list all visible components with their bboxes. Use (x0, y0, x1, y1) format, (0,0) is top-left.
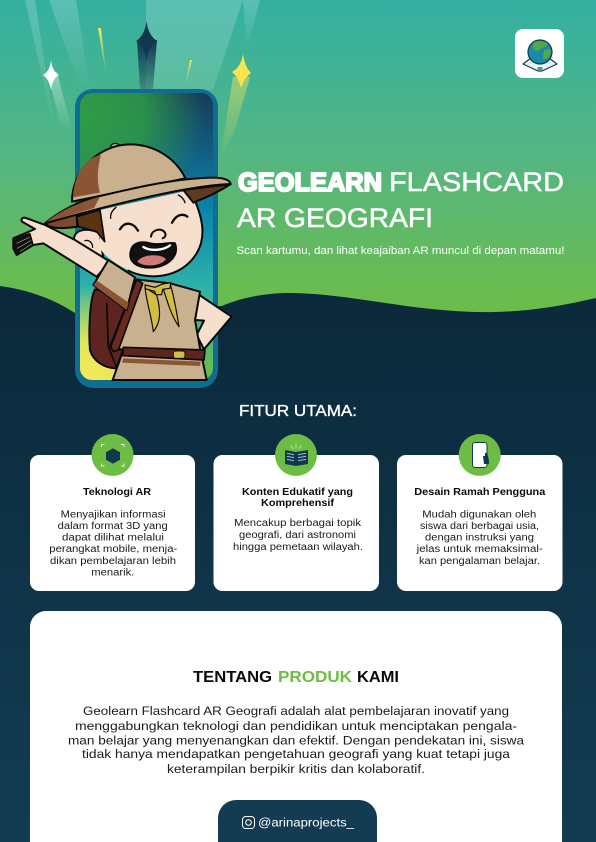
card text: menarik. (91, 568, 134, 578)
icon: phone with hand (459, 434, 501, 476)
heading: KAMI (357, 669, 399, 686)
head (100, 190, 202, 276)
eyes (120, 215, 187, 231)
hat (45, 143, 231, 228)
title: Flashcard: FLASHCARD (389, 167, 564, 197)
description (68, 704, 524, 776)
heading: TENTANG (193, 669, 272, 686)
card text: Mudah digunakan oleh (422, 510, 536, 520)
hat crown (72, 144, 185, 202)
heading (193, 669, 399, 686)
star: white (43, 60, 59, 90)
card title (242, 487, 353, 509)
icon: open book (275, 434, 317, 476)
backpack (89, 289, 140, 368)
description: Geolearn Flashcard AR Geografi adalah alat pembelajaran inovatif yang (83, 704, 509, 718)
light rays (25, 0, 260, 160)
card text: dapat dilihat melalui (62, 532, 164, 544)
nose (151, 230, 166, 238)
description: tidak hanya mendapatkan pengetahuan geografi yang kuat tetapi juga (82, 747, 510, 761)
card text: dalam format 3D yang (58, 521, 168, 532)
card text (233, 518, 363, 553)
phone frame (75, 89, 218, 388)
icon: AR cube (92, 434, 134, 476)
phone screen (80, 93, 213, 380)
card title: Teknologi AR (83, 487, 152, 498)
scarf (145, 283, 179, 332)
mouth (130, 242, 176, 268)
card text: dikan pembelajaran lebih (50, 556, 176, 567)
panel: tentang produk (30, 611, 562, 842)
belt (123, 347, 205, 360)
heading: fitur utama: FITUR UTAMA: (239, 403, 357, 420)
sleeve (93, 260, 135, 310)
card text: hingga pemetaan wilayah. (233, 542, 363, 553)
handle: @arinaprojects_ (258, 816, 354, 830)
card title: Komprehensif (261, 498, 335, 509)
hair (77, 210, 105, 242)
buckle (173, 351, 185, 358)
card text: Menyajikan informasi (61, 510, 166, 520)
hat button (111, 143, 119, 147)
raised arm and hand (13, 218, 110, 277)
brim top (45, 178, 231, 223)
card text (416, 510, 543, 567)
star: navy (136, 21, 157, 61)
panel: Teknologi AR (30, 434, 195, 591)
star: yellow (232, 54, 251, 88)
description: keterampilan berpikir kritis dan kolaboratif. (167, 762, 425, 776)
card text: kan pengalaman belajar. (419, 556, 540, 567)
instagram tab (218, 800, 377, 842)
panel: Desain Ramah Pengguna (397, 434, 562, 591)
card text: geografi, dari astronomi (239, 530, 356, 541)
panel: Konten Edukatif (214, 434, 379, 591)
dark lower background with wave (0, 286, 596, 842)
card text (49, 510, 177, 578)
title: AR Geografi: AR GEOGRAFI (237, 203, 433, 233)
tagline: Scan kartumu, dan lihat keajaiban AR muncul di depan matamu! (236, 245, 564, 257)
right arm (195, 295, 232, 349)
card title: Desain Ramah Pengguna (414, 487, 546, 498)
brim underside (183, 184, 231, 203)
heading: PRODUK (278, 669, 353, 686)
card title: Konten Edukatif yang (242, 487, 353, 498)
ear (74, 230, 104, 264)
title: Geolearn logotype: GEOLEARN (238, 167, 382, 197)
brim shade (47, 197, 100, 222)
icon: globe (528, 40, 552, 64)
bag strap (111, 279, 143, 352)
description: man belajar yang menyenangkan dan efektif. Dengan pendekatan ini, siswa (68, 734, 524, 748)
crown shade (73, 155, 101, 197)
icon: instagram (242, 816, 254, 828)
card text: siswa dari berbagai usia, (420, 521, 539, 532)
description: menggabungkan teknologi dan pendidikan untuk menciptakan pengala- (75, 719, 517, 733)
torso shirt (110, 279, 207, 380)
card text: jelas untuk memaksimal- (416, 544, 543, 555)
icon: open book (523, 58, 557, 71)
card text: perangkat mobile, menja- (49, 544, 177, 555)
card text: dengan instruksi yang (425, 532, 534, 544)
card text: Mencakup berbagai topik (234, 518, 361, 529)
character: explorer kid (13, 143, 232, 380)
logo badge (515, 29, 564, 78)
header green gradient background (0, 0, 596, 320)
